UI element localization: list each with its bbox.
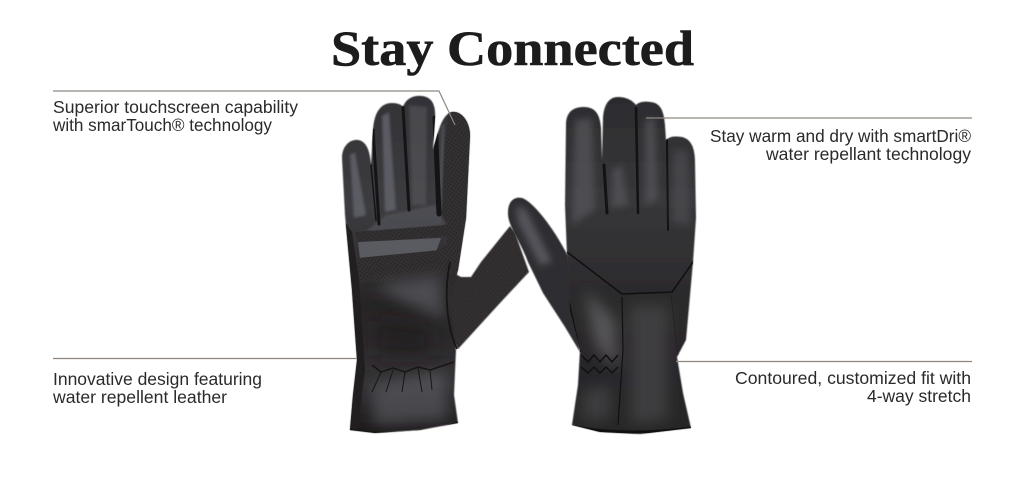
left glove palm highlights <box>370 275 448 425</box>
callout text: touchscreen: with smarTouch® technology <box>52 115 272 135</box>
right glove details <box>566 108 696 432</box>
right glove knuckle highlights <box>572 118 690 225</box>
callout line: touchscreen <box>53 91 455 125</box>
left glove thumb seam <box>447 262 457 349</box>
callout text: smartDri: water repellant technology <box>765 144 971 164</box>
callout text: touchscreen <box>52 97 298 135</box>
callout line: leather <box>53 358 357 360</box>
callout text: smartDri <box>710 126 971 164</box>
title: Stay Connected <box>331 20 694 76</box>
right glove (back view) <box>508 97 696 434</box>
callout text: leather: water repellent leather <box>52 387 227 407</box>
left glove finger gaps <box>371 107 439 224</box>
left glove wrist gathers <box>350 362 458 433</box>
callout lines <box>53 91 972 362</box>
right glove hand body <box>565 97 696 434</box>
left glove index finger mesh <box>441 112 470 276</box>
left glove (palm view) <box>340 96 529 433</box>
callout text: leather <box>52 369 262 407</box>
callout line: water repellant <box>646 117 972 119</box>
left glove side panel <box>346 223 365 430</box>
callout text: fit <box>735 368 971 406</box>
right glove finger gaps <box>604 108 668 230</box>
left glove thumb mesh <box>446 226 529 349</box>
callout text: fit: Contoured, customized fit with <box>735 368 971 388</box>
left glove hand body <box>342 96 470 433</box>
callout text: touchscreen: Superior touchscreen capability <box>53 97 298 117</box>
callout line: fit <box>676 360 972 362</box>
callout text: leather: Innovative design featuring <box>53 369 262 389</box>
right glove thumb highlights <box>516 205 552 265</box>
left glove mesh bands <box>355 225 448 243</box>
left glove details <box>340 105 475 433</box>
right glove seams <box>566 252 696 432</box>
callout text: fit: 4-way stretch <box>867 386 971 406</box>
right glove thumb <box>508 198 580 352</box>
left glove finger highlights <box>350 105 447 232</box>
callout text: smartDri: Stay warm and dry with smartDri® <box>710 126 971 146</box>
right glove leather sheen <box>582 290 668 425</box>
